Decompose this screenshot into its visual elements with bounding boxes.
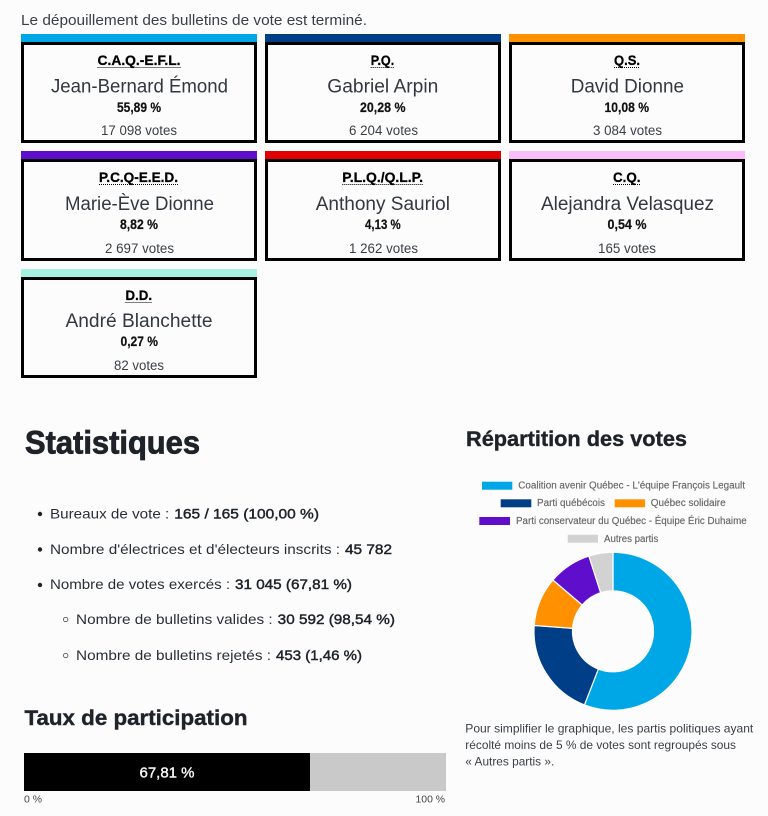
donut chart [534, 552, 692, 710]
vote count: 17 098 votes [101, 123, 177, 138]
candidate name: Anthony Sauriol [316, 194, 450, 215]
card: Q.S. [509, 34, 745, 142]
chart note: Pour simplifier le graphique, les partis politiques ayant [465, 721, 754, 735]
axis maximum: 100 % [416, 795, 445, 806]
candidate name: Alejandra Velasquez [541, 194, 714, 215]
item: valid ballots: 30 592 (98,54 %) [278, 611, 395, 627]
bar value: 67,81 % [140, 766, 195, 782]
card border [266, 44, 500, 142]
heading: Taux de participation: Taux de participation [24, 707, 248, 730]
item: registered electors: 45 782 [345, 541, 392, 557]
chart note [465, 721, 754, 769]
card border [510, 160, 744, 260]
candidate name: Marie-Ève Dionne [65, 194, 214, 215]
legend: C.A.Q.: Coalition avenir Québec - L'équipe François Legault [518, 480, 745, 492]
card: D.D. [21, 269, 257, 376]
axis minimum: 0 % [24, 795, 42, 806]
colour bar [509, 34, 745, 42]
colour bar [21, 151, 257, 159]
card: C.Q. [509, 151, 745, 260]
party abbreviation: C.A.Q.-E.F.L. [98, 52, 180, 68]
party abbreviation: D.D. [126, 287, 152, 303]
party abbreviation: C.Q. [613, 169, 640, 185]
candidate name: André Blanchette [66, 311, 213, 332]
slice: P.Q. [534, 626, 598, 705]
vote share: 10,08 % [604, 100, 649, 115]
candidate name: Gabriel Arpin [327, 76, 438, 97]
item: polling stations [38, 505, 319, 521]
chart legend [479, 480, 747, 545]
card border [22, 44, 256, 142]
vote share: 55,89 % [117, 100, 161, 115]
candidate name: Jean-Bernard Émond [51, 76, 228, 97]
legend: Q.S.: Québec solidaire [651, 498, 726, 509]
item: rejected ballots [63, 647, 362, 663]
slice: Q.S. [534, 580, 582, 628]
colour bar [509, 151, 745, 159]
vote count: 1 262 votes [349, 241, 418, 256]
participation bar [24, 753, 446, 806]
card: P.L.Q./Q.L.P. [265, 151, 501, 260]
vote count: 82 votes [114, 358, 164, 373]
colour bar [265, 34, 501, 42]
intro text: Le dépouillement des bulletins de vote est terminé. [21, 13, 367, 29]
statistics list [38, 505, 395, 663]
item: votes cast: 31 045 (67,81 %) [235, 576, 352, 592]
heading: Statistiques: Statistiques [25, 424, 200, 460]
item: valid ballots: Nombre de bulletins valides : [76, 611, 273, 627]
heading: Répartition des votes: Répartition des votes [466, 428, 687, 451]
item: polling stations: 165 / 165 (100,00 %) [174, 505, 319, 521]
vote count: 3 084 votes [593, 123, 662, 138]
vote share: 0,54 % [608, 217, 646, 232]
card: P.Q. [265, 34, 501, 142]
slice: C.A.Q. [584, 552, 692, 710]
vote share: 20,28 % [360, 100, 406, 115]
party abbreviation: P.Q. [371, 52, 394, 68]
candidate name: David Dionne [571, 76, 684, 97]
item: rejected ballots: 453 (1,46 %) [276, 647, 362, 663]
party abbreviation: P.C.Q-E.E.D. [99, 169, 178, 185]
item: rejected ballots: Nombre de bulletins rejetés : [76, 647, 271, 663]
party abbreviation: P.L.Q./Q.L.P. [342, 169, 423, 185]
legend: P.Q.: Parti québécois [537, 498, 605, 509]
slice: P.C.Q. [553, 556, 601, 605]
card border [22, 160, 256, 260]
bar track [24, 753, 446, 791]
item: valid ballots [63, 611, 395, 627]
legend: P.Q. [501, 498, 605, 509]
legend: others: Autres partis [604, 534, 658, 545]
card border [22, 278, 256, 376]
vote count: 165 votes [598, 241, 656, 256]
chart note: « Autres partis ». [465, 755, 554, 769]
vote count: 6 204 votes [349, 123, 418, 138]
item: polling stations: Bureaux de vote : [50, 505, 169, 521]
vote share: 4,13 % [365, 217, 401, 232]
legend: P.C.Q.: Parti conservateur du Québec - Équipe Éric Duhaime [516, 514, 747, 527]
colour bar [21, 34, 257, 42]
vote count: 2 697 votes [105, 241, 174, 256]
legend: others [568, 534, 658, 545]
item: votes cast: Nombre de votes exercés : [50, 576, 230, 592]
vote share: 0,27 % [120, 334, 158, 349]
legend: Q.S. [615, 498, 726, 509]
bar fill [24, 753, 310, 791]
item: registered electors: Nombre d'électrices et d'électeurs inscrits : [50, 541, 340, 557]
slice: others [589, 552, 613, 593]
card border [266, 160, 500, 260]
chart note: récolté moins de 5 % de votes sont regroupés sous [465, 738, 736, 752]
colour bar [265, 151, 501, 159]
party abbreviation: Q.S. [614, 52, 640, 68]
colour bar [21, 269, 257, 277]
item: votes cast [38, 576, 352, 592]
card border [510, 44, 744, 142]
card: C.A.Q.-E.F.L. [21, 34, 257, 142]
card: P.C.Q-E.E.D. [21, 151, 257, 260]
vote share: 8,82 % [120, 217, 158, 232]
